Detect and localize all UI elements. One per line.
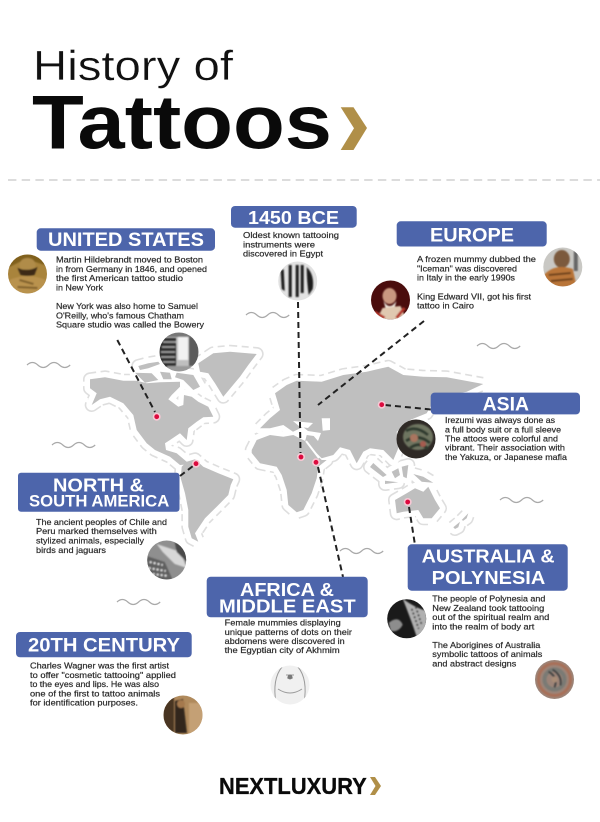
icon: portrait photo sepia	[8, 254, 48, 294]
text: europe: King Edward VII, got his first	[417, 292, 532, 301]
heading: africa and middle east: MIDDLE EAST	[219, 595, 356, 616]
text: australia and polynesia: and abstract designs	[432, 660, 516, 668]
text: asia: the Yakuza, or Japanese mafia	[445, 453, 567, 462]
text: europe: tattoo in Cairo	[417, 302, 474, 311]
text: europe: "Iceman" was discovered	[417, 264, 517, 273]
icon: aboriginal art photo	[534, 660, 574, 700]
connector lines	[117, 302, 431, 577]
heading: united states: UNITED STATES	[48, 230, 204, 251]
heading: europe: EUROPE	[430, 224, 514, 246]
text: asia	[445, 416, 567, 462]
text: africa and middle east: unique patterns of dots on their	[225, 628, 352, 637]
heading: asia: ASIA	[483, 395, 529, 416]
icon: studio photo	[159, 332, 199, 372]
text: europe	[417, 255, 536, 311]
text: africa and middle east: abdomens were discovered in	[225, 637, 345, 646]
text: united states: Martin Hildebrandt moved to Boston	[56, 256, 203, 265]
text: united states: the first American tattoo studio	[56, 274, 184, 283]
text: australia and polynesia: New Zealand took tattooing	[432, 604, 545, 613]
text: africa and middle east: the Egyptian city of Akhmim	[225, 646, 340, 655]
text: australia and polynesia	[432, 595, 550, 668]
text: 1450 bce: Oldest known tattooing	[243, 231, 340, 240]
heading: north and south america	[18, 473, 180, 512]
text: 1450 bce: instruments were	[243, 240, 316, 249]
text: asia: vibrant. Their association with	[445, 444, 565, 453]
text: 20th century: for identification purposes.	[30, 699, 138, 708]
text: united states: in New York	[56, 283, 104, 292]
icon: tattoo instruments	[278, 261, 318, 301]
text: europe: in Italy in the early 1990s	[417, 274, 515, 283]
heading: north and south america: SOUTH AMERICA	[29, 493, 169, 511]
text: asia: The attoos were colorful and	[445, 434, 558, 444]
icon: polynesian tattoo photo	[387, 599, 427, 639]
heading: australia and polynesia	[408, 544, 568, 591]
title	[32, 42, 367, 166]
heading: europe	[397, 221, 547, 246]
text: 20th century: Charles Wagner was the first artist	[30, 662, 170, 671]
panel: 20th century	[16, 632, 203, 735]
heading: asia	[431, 393, 580, 416]
text: north and south america	[36, 518, 167, 555]
icon: king edward portrait	[370, 280, 410, 320]
text: united states: Square studio was called the Bowery	[56, 321, 205, 330]
text: africa and middle east	[225, 619, 352, 655]
text: united states	[56, 256, 207, 330]
text: australia and polynesia: into the realm of body art	[432, 622, 535, 631]
map location dots	[154, 402, 411, 505]
text: united states: O'Reilly, who's famous Chatham	[56, 311, 184, 320]
text: 1450 bce	[243, 231, 340, 259]
text: north and south america: The ancient peoples of Chile and	[36, 518, 167, 527]
title: History of	[33, 42, 233, 89]
text: north and south america: stylized animals, especially	[36, 536, 145, 546]
text: europe: A frozen mummy dubbed the	[417, 255, 536, 264]
icon: charles wagner photo	[163, 695, 203, 735]
panel: north and south america	[18, 473, 187, 580]
text: africa and middle east: Female mummies displaying	[225, 619, 341, 628]
text: 20th century	[30, 662, 177, 708]
heading: africa and middle east	[207, 577, 368, 617]
text: australia and polynesia: symbolic tattoos of animals	[432, 650, 542, 659]
text: asia: a full body suit or a full sleeve	[445, 425, 561, 434]
icon: iceman photo	[543, 247, 583, 287]
decorative waves	[27, 312, 543, 604]
icon: irezumi photo	[396, 419, 436, 459]
panel: africa and middle east	[207, 577, 368, 705]
heading: 20th century: 20TH CENTURY	[28, 635, 180, 657]
text: australia and polynesia: The Aborigines of Australia	[432, 641, 541, 650]
heading: 1450 bce: 1450 BCE	[248, 207, 339, 228]
text: north and south america: birds and jaguars	[36, 546, 106, 555]
icon: mummy dots drawing	[270, 665, 310, 705]
text: 20th century: one of the first to tattoo animals	[30, 689, 160, 698]
heading: australia and polynesia: POLYNESIA	[432, 567, 545, 588]
title: Tattoos	[32, 80, 332, 166]
text: australia and polynesia: The people of Polynesia and	[432, 595, 546, 604]
text: australia and polynesia: out of the spiritual realm and	[432, 613, 550, 622]
text: north and south america: Peru marked themselves with	[36, 527, 157, 536]
panel: europe	[370, 221, 583, 320]
text: united states: in from Germany in 1846, and opened	[56, 265, 207, 274]
heading: north and south america: NORTH &	[53, 475, 144, 496]
text: asia: Irezumi was always done as	[445, 416, 555, 425]
text: united states: New York was also home to Samuel	[56, 302, 198, 311]
panel: united states	[8, 228, 215, 372]
panel: 1450 bce	[231, 206, 357, 301]
heading: africa and middle east: AFRICA &	[240, 579, 334, 600]
text: 1450 bce: discovered in Egypt	[243, 250, 324, 259]
heading: australia and polynesia: AUSTRALIA &	[422, 546, 555, 567]
world map	[90, 352, 483, 542]
panel: asia	[396, 393, 580, 462]
icon: stylized tattoo photo	[147, 540, 187, 580]
text: 20th century: to the eyes and lips. He was also	[30, 680, 159, 689]
logo: nextluxury: NEXTLUXURY	[219, 773, 367, 799]
panel: australia and polynesia	[387, 544, 574, 700]
text: 20th century: to offer "cosmetic tattooing" applied	[30, 671, 177, 680]
